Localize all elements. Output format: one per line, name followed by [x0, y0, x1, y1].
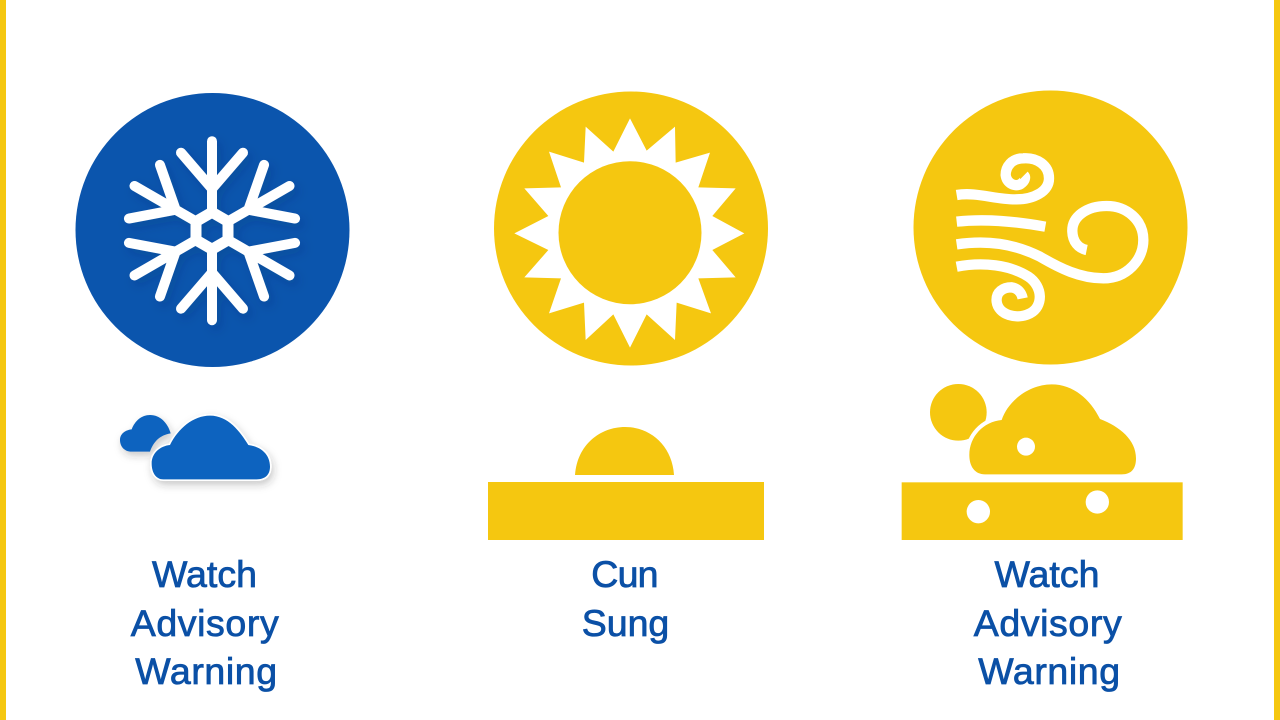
- label: cun sung: Cun: [591, 553, 658, 595]
- icon: snowflake in blue circle: [76, 93, 350, 367]
- label: watch advisory warning: Warning: [135, 650, 278, 692]
- label: watch advisory warning: Warning: [978, 650, 1121, 692]
- right yellow border: [1274, 0, 1280, 720]
- label: watch advisory warning: Watch: [152, 553, 257, 595]
- column 2: sun: [488, 92, 768, 644]
- label: watch advisory warning: Advisory: [131, 602, 279, 644]
- icon: sun rising over horizon: [488, 427, 764, 540]
- left yellow border: [0, 0, 6, 720]
- label: cun sung: [582, 553, 669, 644]
- column 1: snow: [76, 93, 350, 692]
- icon: sun in yellow circle: [494, 92, 768, 366]
- icon: cloud and dust over ground: [902, 384, 1183, 540]
- label: watch advisory warning: [131, 553, 279, 692]
- column 3: wind: [902, 90, 1188, 692]
- label: watch advisory warning: [974, 553, 1122, 692]
- label: cun sung: Sung: [582, 602, 669, 644]
- label: watch advisory warning: Advisory: [974, 602, 1122, 644]
- icon: blue clouds: [120, 415, 270, 479]
- label: watch advisory warning: Watch: [995, 553, 1099, 595]
- icon: wind in yellow circle: [914, 90, 1188, 364]
